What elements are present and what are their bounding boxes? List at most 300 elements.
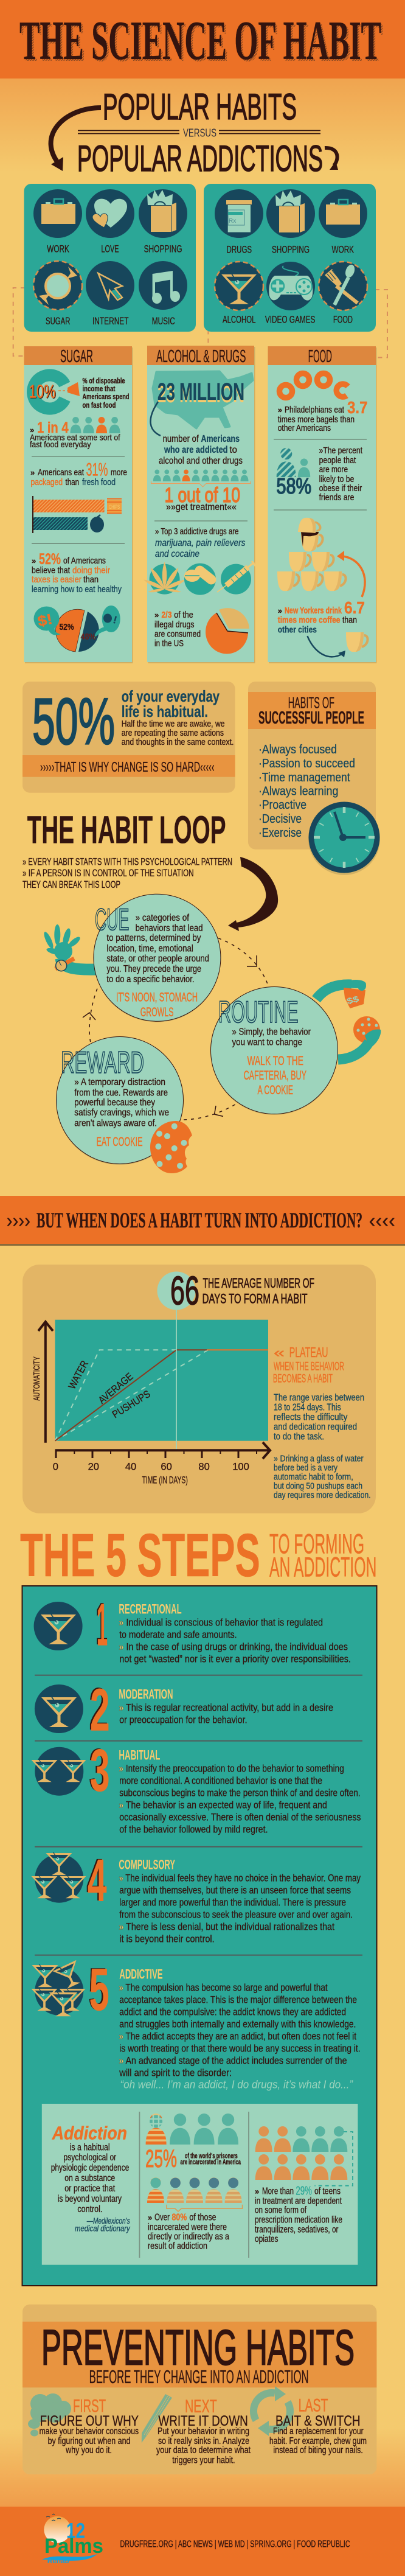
step 5: addictive: acceptance takes place. This is the major difference between the [119,1995,357,2006]
step: next: WRITE IT DOWN [158,2413,248,2429]
step: next: triggers your habit. [172,2455,235,2465]
pictogram: 29% of teens: of teens [314,2187,341,2197]
text: cue description: state, or other people around [106,954,209,964]
text: everyday life: life is habitual. [122,702,208,721]
text: number of americans: number of [163,434,199,444]
arrow and mug [308,632,368,657]
text: cue description: » categories of [136,913,189,923]
step 3: habitual: 3 [89,1736,108,1803]
definition: addiction [51,2123,130,2233]
line chart: automaticity over time: AUTOMATICITY [32,1356,42,1401]
dashed arrow: routine to reward [182,1105,235,1120]
stat: 52% taxes: 52% [39,551,61,568]
banner: when does a habit turn into addiction: ‹‹‹‹ [369,1209,395,1232]
arrow [151,402,161,436]
text: everyday life [122,687,234,747]
step: first: FIRST [73,2396,106,2416]
text: reward description: powerful because they [74,1098,155,1108]
footer [0,2507,405,2576]
step: last: LAST [299,2395,328,2415]
banner: when does a habit turn into addiction: ›››› [7,1209,30,1232]
step 4: compulsory: it is beyond their control. [119,1934,215,1945]
step 1: recreational [34,1590,351,1665]
connector: alcohol [208,285,214,346]
icon: internet cursor [86,261,134,310]
panel: alcohol and drugs [143,346,255,663]
step 4: compulsory: larger and more powerful than the individual. There is pressure [119,1897,346,1908]
text: obese friends: likely to be [319,474,354,484]
heading: habits of: HABITS OF [288,693,334,711]
pictogram: 25% prisoners [145,2114,241,2173]
pictogram: 29% of teens: 29% [296,2185,312,2198]
pictogram: 80% incarcerated: incarcerated were there [148,2222,227,2232]
quote: “oh well... I’m an addict, I do drugs, it’s what I do...” [120,2079,353,2091]
axis: x [55,1442,270,1459]
panel: five steps [22,1586,377,2286]
step 5: addictive: » The compulsion has become so large and powerful that [119,1983,328,1994]
banner text: ›››››THAT IS WHY CHANGE IS SO HARD‹‹‹‹‹ [40,759,215,775]
text: routine example: CAFETERIA, BUY [244,1069,306,1083]
text: disposable income: on fast food [83,401,116,410]
text: cue example [116,991,198,1019]
heading: popular habits versus popular addictions [51,86,338,179]
callout: plateau: « [274,1345,285,1360]
list of habits: ·Time management [258,771,350,784]
stat: 52% taxes: » [32,556,36,565]
definition: addiction: physiologic dependence [51,2163,129,2173]
step 5: addictive: » An advanced stage of the addict includes surrender of the [119,2056,347,2067]
text: disposable income: income that [83,385,116,393]
logo: 12 Palms Rehab [42,2514,103,2565]
panel: cue [94,894,221,1022]
text: everyday life: are repeating the same actions [122,728,224,738]
stat: bagels 3.7: times more bagels than [278,415,355,425]
logo: 12 Palms Rehab: Rehab [47,2557,69,2565]
step 4: compulsory: COMPULSORY [119,1857,175,1873]
text: routine description: » Simply, the behavior [232,1027,311,1038]
step 4: compulsory: » There is less denial, but the individual rationalizes that [119,1922,334,1933]
pictogram: 29% of teens: prescription medication like [255,2215,342,2225]
donut chart 10% [27,369,80,414]
icon: pills [184,564,218,595]
step 3: habitual: occasionally excessive. There is often denial of the seriousness [119,1812,361,1823]
step 3: habitual: 3 [90,1737,109,1804]
icon: syringe [217,561,255,595]
stat: 31% packaged: Americans eat [38,468,84,478]
stat: 31% packaged: » [30,468,35,477]
definition: addiction: Addiction [52,2123,127,2144]
text: range of days [274,1393,364,1442]
text: disposable income: Americans spend [83,393,129,401]
stat: bagels 3.7 [278,398,367,433]
list of habits: ·Decisive [258,812,302,826]
pictogram: 80% incarcerated [147,2177,242,2251]
text: obese friends: »The percent [319,445,363,456]
text: obese friends: obese if their [319,483,362,494]
text: two thirds illegal drugs: illegal drugs [154,620,195,630]
step 1: recreational: 1 [97,1591,108,1658]
pictogram: 80% incarcerated: Over [154,2212,170,2222]
text: top 3 drugs: marijuana, pain relievers [155,538,246,548]
labels: addictions [223,244,354,325]
arrow: up the pyramid [337,551,365,597]
step 4: compulsory: 4 [88,1847,106,1914]
step 2: moderation [35,1675,333,1743]
stat: bagels 3.7: Philadelphians eat [285,405,344,415]
stat: 31% packaged: more [111,468,127,478]
text: cue example: IT'S NOON, STOMACH [116,991,198,1005]
stat: 31% packaged: packaged [30,478,63,487]
text: routine example: WALK TO THE [247,1054,303,1068]
step: next: so it really sinks in. Analyze [158,2436,249,2446]
step 2: moderation: 2 [90,1676,109,1743]
panel: 50 percent habitual [22,682,235,793]
labels: habits: INTERNET [92,315,129,327]
icon: food utensils [319,262,367,310]
callout: plateau: PLATEAU [289,1344,328,1360]
text: habit loop intro [22,856,232,890]
logo: 12 Palms Rehab: 12 [66,2519,85,2543]
pictogram: 80% incarcerated: of those [189,2212,216,2222]
labels: addictions: ALCOHOL [223,313,255,325]
axis labels: 0 [53,1462,58,1473]
list of habits: ·Always focused [258,743,337,756]
connector: sugar [13,288,33,356]
text: cue description: location, time, emotional [106,943,193,954]
pictogram: 29% of teens: More than [262,2187,294,2197]
step: next: Put your behavior in writing [158,2426,249,2437]
dashed arrow: reward to cue [83,988,98,1042]
heading: routine: ROUTINE [218,995,299,1029]
axis: y [38,1322,53,1443]
list of habits: ·Exercise [258,826,302,840]
illustration: bitten cookie [150,1121,192,1173]
panel: reward [56,1037,184,1165]
icon: bagels [280,374,348,398]
labels: habits: LOVE [101,243,119,255]
step: last: instead of biting your nails. [273,2445,363,2456]
list of habits: ·Always learning [258,785,338,798]
stat: coffee 6.7: 6.7 [344,598,365,617]
icon: pencil [142,2394,172,2443]
text: two thirds illegal drugs: are consumed [154,629,201,639]
icon: marijuana [143,562,187,595]
icon: sugar candy [33,261,82,310]
text: obese friends: friends are [319,492,354,503]
icon: recycle arrows [254,2386,290,2436]
axis labels: 80 [198,1462,210,1473]
step 3: habitual: » The behavior is an expected way of life, frequent and [119,1800,327,1811]
background gradient bottom [0,2428,405,2507]
heading: cue: CUE [95,902,129,937]
bar chart: packaged vs fresh: CHIPS [109,504,120,510]
text: top 3 drugs: and cocaine [155,549,199,559]
step: first: why you do it. [66,2445,112,2456]
donut chart 10%: 10% [29,381,56,402]
stat: coffee 6.7: » [278,606,282,615]
heading: the 5 steps: THE 5 STEPS [20,1521,260,1590]
step 3: habitual [32,1736,361,1835]
step: first [40,2396,139,2456]
stat: 31% packaged: fresh food [82,478,116,487]
stat: 31% packaged [30,460,127,487]
text: two thirds illegal drugs [154,610,201,649]
stat: 1 in 4: Americans eat some sort of [30,432,120,442]
axis labels: 20 [88,1462,99,1473]
pie chart: 52 vs 48: 48% [80,632,96,642]
axis labels: 60 [161,1462,172,1473]
text: reward description: from the cue. Rewards are [74,1088,168,1098]
pictogram: 29% of teens: on some form of [255,2205,307,2216]
panel: habits of successful people [248,682,376,850]
logo: 12 Palms Rehab: Palms [44,2535,103,2558]
stat: coffee 6.7: than [342,616,357,626]
panel: food [268,346,377,663]
pictogram: people: 58% [276,473,311,498]
text: routine example [244,1054,306,1097]
icon: drugs bottle: Rx [229,218,236,225]
connector: food [367,290,387,358]
text: range of days: reflects the difficulty [274,1412,348,1423]
text: cue example: GROWLS [140,1005,174,1019]
step 5: addictive: addict and the compulsive: the addict knows they are addicted [119,2007,346,2018]
pictogram: 25% prisoners: of the world's prisoners [185,2152,238,2160]
labels: habits: MUSIC [152,315,175,327]
step 3: habitual: » Intensify the preoccupation to do the behavior to something [119,1764,344,1775]
stat: 52% taxes: believe that [32,566,70,576]
definition: addiction: —Medilexicon's [86,2216,130,2225]
text: two thirds illegal drugs: of the [174,610,193,620]
step 1: recreational: 1 [95,1590,108,1657]
background gradient top [0,79,405,173]
line chart: automaticity over time: WATER [66,1359,91,1391]
icon: thought cloud [28,2393,71,2437]
line chart: automaticity over time [32,1309,270,1486]
labels: habits [46,243,182,327]
labels: habits: SUGAR [46,315,70,327]
text: top 3 drugs [155,527,246,559]
stat: 1 in 4: » [30,425,34,435]
text: number of americans: alcohol and other drugs [159,456,243,466]
illustration: hand with wallet: $$ [345,994,360,1006]
pie chart: two thirds [206,608,249,654]
definition: addiction: medical dictionary [75,2224,130,2233]
step: next [156,2396,251,2465]
icon: love hearts [86,189,134,238]
stat: bagels 3.7: other Americans [278,424,331,433]
heading: popular habits versus popular addictions: VERSUS [183,127,216,139]
text: obese friends [319,445,363,503]
step: last: Find a replacement for your [273,2426,364,2437]
text: range of days: to do the task. [274,1432,324,1442]
dashed arrow: cue to routine [218,938,268,983]
callout: 66 days: DAYS TO FORM A HABIT [202,1291,308,1307]
text: water vs pushups: automatic habit to form, [274,1473,353,1482]
stat: 52% taxes: of Americans [63,556,106,566]
definition: addiction: is beyond voluntary [58,2194,122,2204]
list of habits [258,743,355,840]
labels: habits: WORK [47,243,69,255]
text: everyday life: and thoughts in the same context. [122,737,234,747]
icon: work briefcase [319,189,367,238]
step: last: habit. For example, chew gum [269,2436,367,2446]
text: water vs pushups: » Drinking a glass of water [274,1454,364,1464]
pictogram: 25% prisoners: are incarcerated in America [180,2158,241,2166]
text: water vs pushups: before bed is a very [274,1464,338,1473]
stat: 1 in 4 [30,417,120,449]
list of habits: ·Passion to succeed [258,757,355,770]
donut chart 10%: 10% [30,381,57,403]
text: two thirds illegal drugs: 2/3 [162,610,171,620]
heading: reward: REWARD [61,1045,144,1080]
step 5: addictive: 5 [89,1956,109,2023]
pictogram: 1 out of 10 [151,470,251,487]
step: first: make your behavior conscious [40,2426,139,2437]
callout: plateau: WHEN THE BEHAVIOR [274,1361,344,1374]
icon: alcohol martini [215,262,263,310]
icon: music notes [139,261,187,310]
illustration: hand with watch [43,924,96,971]
pictogram: 29% of teens: opiates [255,2234,279,2244]
text: range of days: The range varies between [274,1393,364,1403]
labels: addictions: SHOPPING [272,244,310,256]
stat: 52% taxes: doing their [72,566,110,576]
labels: addictions: FOOD [333,313,353,325]
step 2: moderation: » This is regular recreational activity, but add in a desire [119,1703,333,1714]
step: next: your data to determine what [156,2445,251,2456]
text: reward description: » A temporary distraction [74,1077,165,1087]
text: disposable income [83,377,129,410]
text: everyday life: of your everyday [122,687,220,705]
labels: addictions: DRUGS [226,244,252,256]
text: number of americans: who are addicted [164,445,227,455]
stat: 52% taxes: taxes is easier [32,575,81,585]
step: last [269,2395,367,2456]
text: obese friends: are more [319,464,348,475]
text: routine description: you want to change [232,1038,302,1048]
line chart: automaticity over time: PUSHUPS [110,1388,153,1420]
text: routine example: A COOKIE [258,1083,293,1097]
text: reward description: satisfy cravings, which we [74,1108,169,1118]
pictogram: 29% of teens: in treatment are dependent [255,2196,342,2207]
step 3: habitual: of the behavior followed by mild regret. [119,1824,268,1835]
stat: coffee 6.7: other cities [278,626,317,635]
labels: addictions: VIDEO GAMES [265,313,315,325]
definition: addiction: control. [77,2204,102,2215]
panel: food: FOOD [308,347,332,366]
stat: 1 out of 10 [165,484,240,512]
icon: shopping bag [266,189,315,238]
stat: 23 million: 23 MILLION [158,379,244,405]
pictogram: 25% prisoners: 25% [145,2145,177,2173]
panel: sugar [24,346,133,663]
text: two thirds illegal drugs: » [154,610,159,620]
bar chart: packaged vs fresh [32,496,122,533]
pictogram: 29% of teens: tranquilizers, sedatives, or [255,2225,338,2235]
banner: when does a habit turn into addiction [0,1196,405,1246]
callout: 66 days [157,1268,314,1313]
line chart: automaticity over time: TIME (IN DAYS) [142,1475,188,1486]
stat: 50%: 50% [32,685,115,758]
stat: 23 million: 23 MILLION [158,381,244,408]
illustration: hand with cookie [338,1016,381,1059]
step 1: recreational: » Individual is conscious of behavior that is regulated [119,1618,323,1628]
stat: 1 out of 10: »»get treatment«« [166,502,237,512]
callout: plateau: BECOMES A HABIT [273,1373,333,1386]
text: two thirds illegal drugs: in the US [154,639,184,649]
pie chart: 52 vs 48: $! [36,611,54,630]
text: everyday life: Half the time we are awake, we [122,719,225,729]
stat: 1 in 4: 1 in 4 [37,419,69,436]
step 4: compulsory: from the subconscious to seek the pleasure over and over again. [119,1910,353,1921]
stat: coffee 6.7: New Yorkers drink [285,606,342,616]
stat: 52% taxes: learning how to eat healthy [32,585,122,595]
text: habit loop intro: » IF A PERSON IS IN CONTROL OF THE SITUATION [22,867,194,879]
panel: popular addictions [204,184,376,332]
text: disposable income: % of disposable [83,377,125,385]
text: range of days: and dedication required [274,1422,357,1433]
definition: addiction: or practice that [64,2183,116,2194]
step 1: recreational: not get “wasted” nor is it ever a priority over responsibilities. [119,1654,351,1665]
heading: sugar: SUGAR [60,347,93,366]
arrow: big loop arrow [228,857,278,931]
pictogram: 29% of teens: » [255,2187,259,2196]
icon: shopping bag [139,189,187,238]
step 4: compulsory: argue with themselves, but there is an unseen force that seems [119,1885,351,1896]
text: water vs pushups: but doing 50 pushups each [274,1482,362,1492]
text: water vs pushups: day requires more dedication. [274,1491,371,1501]
step 3: habitual: HABITUAL [119,1748,160,1763]
text: cue description: to do a specific behavior. [106,974,195,985]
callout: 66 days: 66 [170,1268,199,1313]
stat: 23 million [158,379,244,408]
text: reward description: aren't always aware of. [74,1119,157,1129]
step 1: recreational: RECREATIONAL [119,1602,182,1617]
text: obese friends: people that [319,455,356,466]
pie chart: 52 vs 48: 52% [60,622,74,632]
stat: 1 out of 10: 1 out of 10 [165,484,240,507]
step 5: addictive: ADDICTIVE [119,1967,163,1982]
text: cue description: you. They precede the urge [106,964,201,974]
callout: plateau [273,1344,344,1386]
step 1: recreational: to moderate and safe amounts. [119,1630,237,1641]
step 5: addictive: is worth treating or that there would be any success in treating it. [119,2044,361,2054]
pie chart: 52 vs 48: ! [112,614,118,626]
stat: coffee 6.7: times more coffee [278,616,341,626]
definition: addiction: psychological or [63,2152,116,2163]
step 5: addictive [32,1955,361,2091]
step 1: recreational: » In the case of using drugs or drinking, the individual does [119,1642,348,1653]
step 5: addictive: » The addict accepts they are an addict, but often does not feel it [119,2031,356,2042]
text: number of americans: Americans [201,434,240,444]
text: cue description: to patterns, determined by [106,933,201,943]
text: habit loop intro: » EVERY HABIT STARTS WITH THIS PSYCHOLOGICAL PATTERN [22,856,232,868]
text: range of days: 18 to 254 days. This [274,1403,341,1413]
stat: bagels 3.7: » [278,405,282,414]
text: number of americans [159,434,243,466]
icon: work briefcase [33,189,82,238]
step 4: compulsory: 4 [86,1846,105,1913]
step 2: moderation: 2 [89,1675,108,1742]
panel: routine [210,987,338,1115]
definition: addiction: on a substance [64,2173,115,2183]
text: water vs pushups [274,1454,371,1501]
heading: alcohol and drugs: ALCOHOL & DRUGS [156,347,246,366]
step 5: addictive: and struggles both internally and externally with this knowledge. [119,2019,356,2030]
heading: the habit loop: THE HABIT LOOP [27,808,226,852]
panel: preventing habits [22,2305,376,2474]
text: reward description [74,1077,169,1129]
